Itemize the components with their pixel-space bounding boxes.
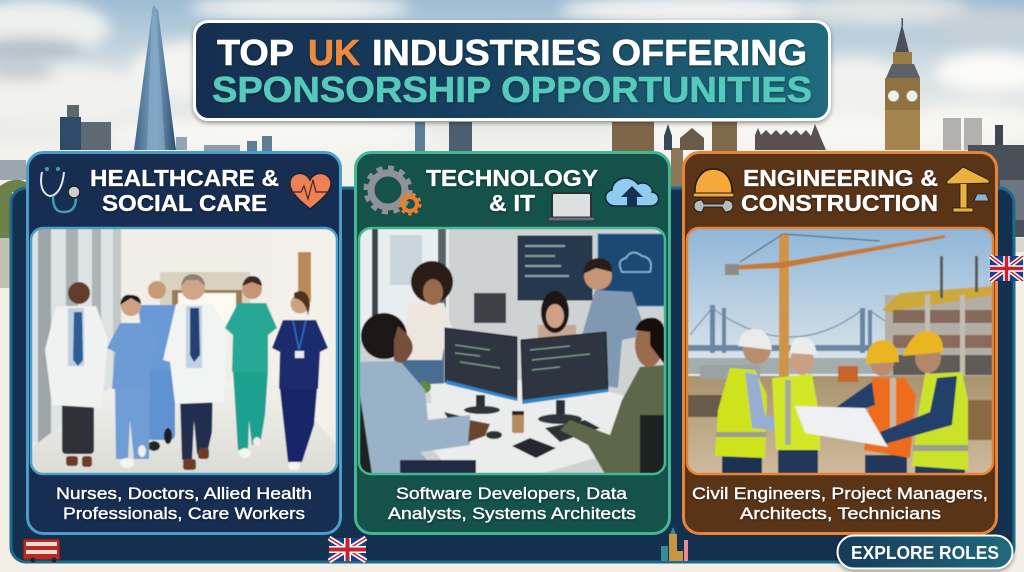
outer navy panel: [11, 188, 1014, 562]
worker 1: [714, 328, 776, 473]
person: man standing with glasses: [582, 258, 647, 388]
suspension bridge: [690, 305, 905, 353]
card heading: ENGINEERING &: [743, 165, 938, 191]
background: London skyline photo: [0, 0, 1024, 288]
card caption: Civil Engineers, Project Managers,: [692, 484, 988, 503]
title banner: [194, 22, 830, 120]
title line 1: INDUSTRIES OFFERING: [372, 32, 807, 73]
card caption: Architects, Technicians: [740, 504, 941, 523]
person: woman at back: [538, 290, 576, 339]
person: nurse in navy scrubs: [272, 291, 328, 470]
card heading: HEALTHCARE &: [90, 165, 279, 191]
skyline: The Shard: [134, 5, 176, 150]
icon: tiny London skyline: [661, 527, 688, 561]
card caption: Nurses, Doctors, Allied Health: [56, 484, 312, 503]
icon: cloud upload: [606, 178, 659, 207]
image frame: [359, 228, 665, 474]
person: seated man in light blue shirt: [359, 313, 490, 474]
ground: [687, 376, 993, 474]
card heading: TECHNOLOGY: [426, 165, 598, 191]
monitor right: [521, 332, 608, 424]
card heading: CONSTRUCTION: [741, 190, 938, 216]
person: nurse in blue behind: [138, 281, 177, 451]
image frame: [31, 228, 337, 474]
card heading: & IT: [489, 190, 535, 216]
crane: [725, 234, 945, 380]
icon: stethoscope: [41, 167, 80, 212]
worker 3: [828, 340, 916, 474]
card caption: [692, 484, 988, 523]
person: nurse in light blue: [106, 294, 150, 468]
skyline: left buildings: [0, 105, 472, 238]
worker 4: [880, 331, 968, 474]
image frame: [687, 228, 993, 474]
card caption: Analysts, Systems Architects: [388, 504, 636, 523]
title line 1: TOP: [217, 32, 294, 73]
card heading: [426, 165, 598, 216]
person: woman with curly hair standing: [401, 260, 454, 384]
blueprint: [795, 406, 888, 447]
person: clinician in teal scrubs: [225, 276, 277, 458]
icon: heart with pulse: [290, 173, 331, 209]
icon: tower crane: [947, 167, 989, 212]
photo: construction site: [687, 228, 993, 474]
title line 2: SPONSORSHIP OPPORTUNITIES: [212, 69, 812, 110]
icon: UK flag right: [990, 256, 1023, 281]
panel: healthcare and social care: [28, 152, 340, 534]
title line 1: UK: [308, 32, 360, 73]
card caption: Software Developers, Data: [396, 484, 628, 503]
icon: UK flag bottom: [329, 538, 366, 561]
building under construction: [882, 256, 993, 380]
card caption: Professionals, Care Workers: [63, 504, 305, 523]
card caption: [388, 484, 636, 523]
person: senior doctor in white coat: [163, 274, 228, 470]
desk items: [419, 381, 600, 458]
skyline: Big Ben: [885, 18, 920, 150]
person: seated man in olive shirt: [560, 318, 666, 474]
icon: laptop: [548, 193, 595, 221]
icon: red double decker bus: [23, 539, 60, 562]
card caption: [56, 484, 312, 523]
photo: hospital staff in corridor: [31, 228, 337, 474]
card heading: [90, 165, 279, 216]
desk: [426, 380, 624, 473]
icon: hard hat and wrench: [693, 169, 734, 212]
panel: technology and IT: [356, 152, 670, 534]
card heading: [741, 165, 938, 216]
button: explore roles: [838, 536, 1012, 568]
photo: tech team at monitors: [359, 228, 666, 474]
icon: gears: [366, 168, 420, 214]
card heading: SOCIAL CARE: [102, 190, 267, 216]
button: explore roles: EXPLORE ROLES: [851, 543, 999, 563]
monitor left: [445, 328, 517, 414]
skyline: Palace of Westminster: [612, 118, 1024, 237]
worker 2: [772, 337, 820, 474]
wall monitors: [518, 234, 665, 306]
person: doctor with dark skin: [45, 282, 108, 467]
panel: engineering and construction: [684, 152, 996, 534]
